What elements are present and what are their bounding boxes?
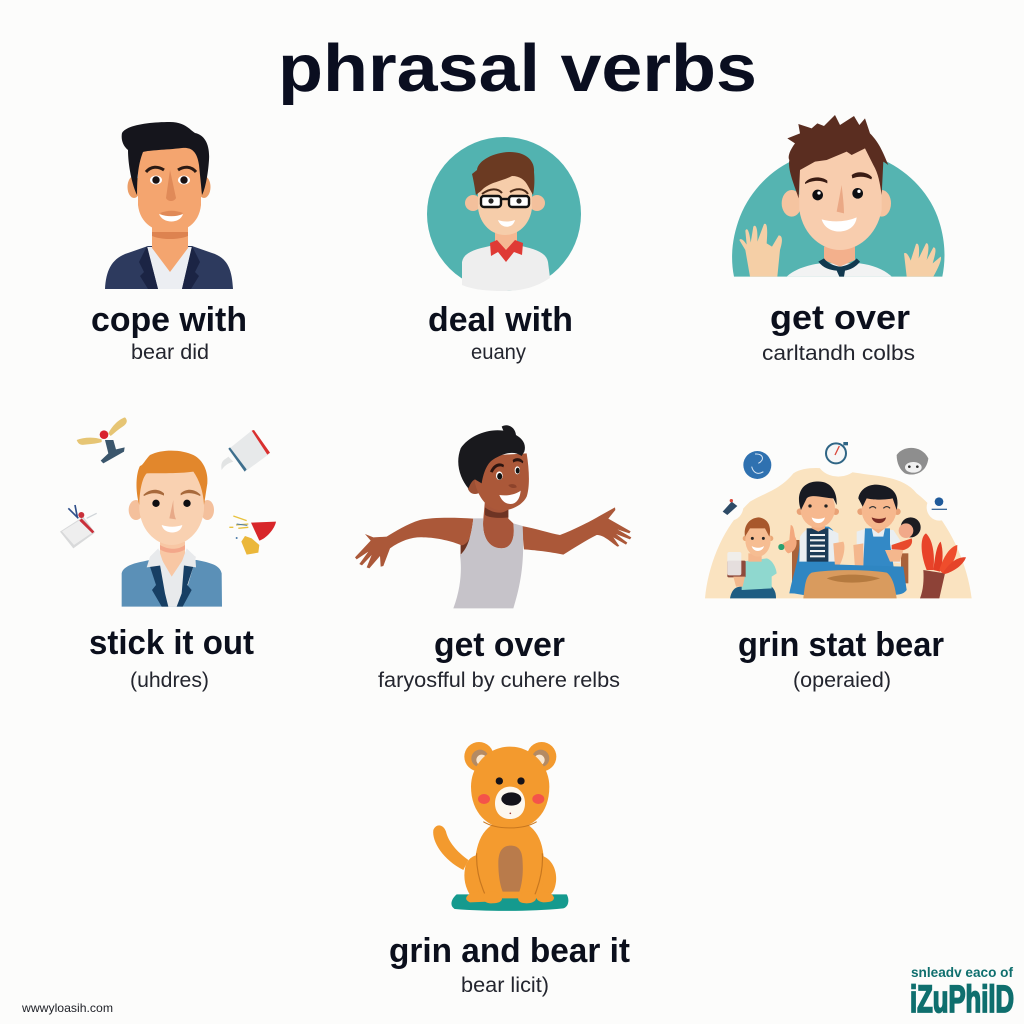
icon: waving man on teal semicircle (732, 115, 945, 277)
icon: party popper (229, 516, 276, 555)
icon: man in dark suit (105, 122, 233, 289)
title: phrasal verbs (278, 31, 757, 106)
icon: thought bubbles (717, 433, 952, 521)
icon: boy with outstretched arms (355, 425, 631, 608)
panel: stick it out (60, 417, 276, 692)
icon: book (221, 430, 270, 472)
heading: cope with (91, 301, 247, 339)
heading: get over (770, 299, 910, 337)
icon: gift box (60, 505, 97, 548)
caption: bear did (131, 341, 209, 364)
icon: table (789, 563, 907, 598)
icon: blond man with floating objects (60, 417, 276, 607)
caption: faryosfful by cuhere relbs (378, 669, 620, 692)
icon: man in striped shirt (778, 481, 844, 593)
caption: (uhdres) (130, 669, 209, 692)
panel: get over (top) (732, 115, 945, 365)
logo: snleadv eaco of (911, 964, 1013, 980)
caption: euany (471, 341, 526, 364)
website footer: wwwyloasih.com (21, 1001, 113, 1015)
panel: grin stat bear (705, 433, 972, 692)
panel: deal with (427, 137, 581, 364)
panel: cope with (91, 122, 247, 364)
icon: chair backs (792, 540, 908, 583)
icon: orange bear on green mat (433, 742, 568, 911)
panel: get over (middle) (355, 425, 631, 692)
heading: grin and bear it (389, 932, 630, 970)
icon: family scene at table (705, 433, 972, 598)
caption: bear licit) (461, 974, 549, 997)
panel: grin and bear it (389, 742, 630, 997)
caption: (operaied) (793, 669, 891, 692)
icon: propeller (77, 417, 127, 463)
heading: deal with (428, 301, 573, 339)
logo (910, 964, 1014, 1021)
heading: stick it out (89, 624, 254, 662)
heading: grin stat bear (738, 626, 944, 664)
icon: boy with mug (727, 517, 777, 598)
icon: plant (920, 533, 966, 598)
heading: get over (434, 626, 565, 664)
icon: man with glasses in teal circle (427, 137, 581, 291)
caption: carltandh colbs (762, 342, 915, 365)
icon: man in blue apron with baby (853, 485, 921, 587)
